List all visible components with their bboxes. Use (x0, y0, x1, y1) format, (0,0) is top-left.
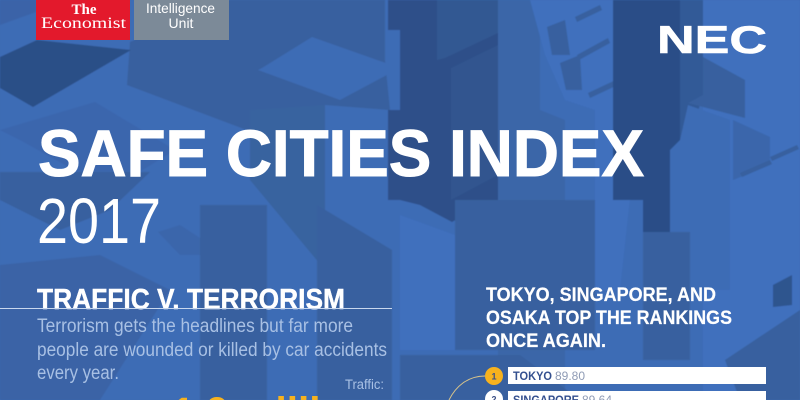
body text (37, 316, 387, 384)
title: SAFE CITIES INDEX (38, 116, 644, 190)
heading underline (0, 308, 392, 309)
heading: rankings: OSAKA TOP THE RANKINGS (486, 307, 732, 329)
rank 1: Tokyo: 1 (491, 372, 497, 382)
logo: The Economist: Economist (41, 15, 127, 32)
year: 2017 (37, 185, 161, 257)
logo: Intelligence Unit: Intelligence (146, 0, 215, 16)
body text: Terrorism gets the headlines but far more (37, 316, 353, 337)
body text: every year. (37, 363, 119, 384)
logo: NEC: NEC (657, 19, 767, 62)
rank 1: Tokyo: 89.80 (555, 369, 585, 383)
heading: traffic v. terrorism: TRAFFIC V. TERRORISM (37, 284, 345, 316)
traffic label: Traffic: (345, 377, 384, 392)
heading: rankings (486, 284, 732, 352)
rank 1: Tokyo: TOKYO (513, 369, 552, 383)
rank 1: Tokyo (485, 367, 766, 385)
heading: rankings: TOKYO, SINGAPORE, AND (486, 284, 716, 306)
heading: rankings: ONCE AGAIN. (486, 330, 606, 352)
connector line (449, 376, 485, 400)
body text: people are wounded or killed by car accidents (37, 340, 387, 361)
logo: Intelligence Unit (134, 0, 229, 40)
logo: The Economist: The (71, 2, 97, 18)
logo: The Economist (36, 0, 130, 40)
rank 2: Singapore (485, 390, 766, 400)
logo: Intelligence Unit: Unit (169, 15, 194, 31)
